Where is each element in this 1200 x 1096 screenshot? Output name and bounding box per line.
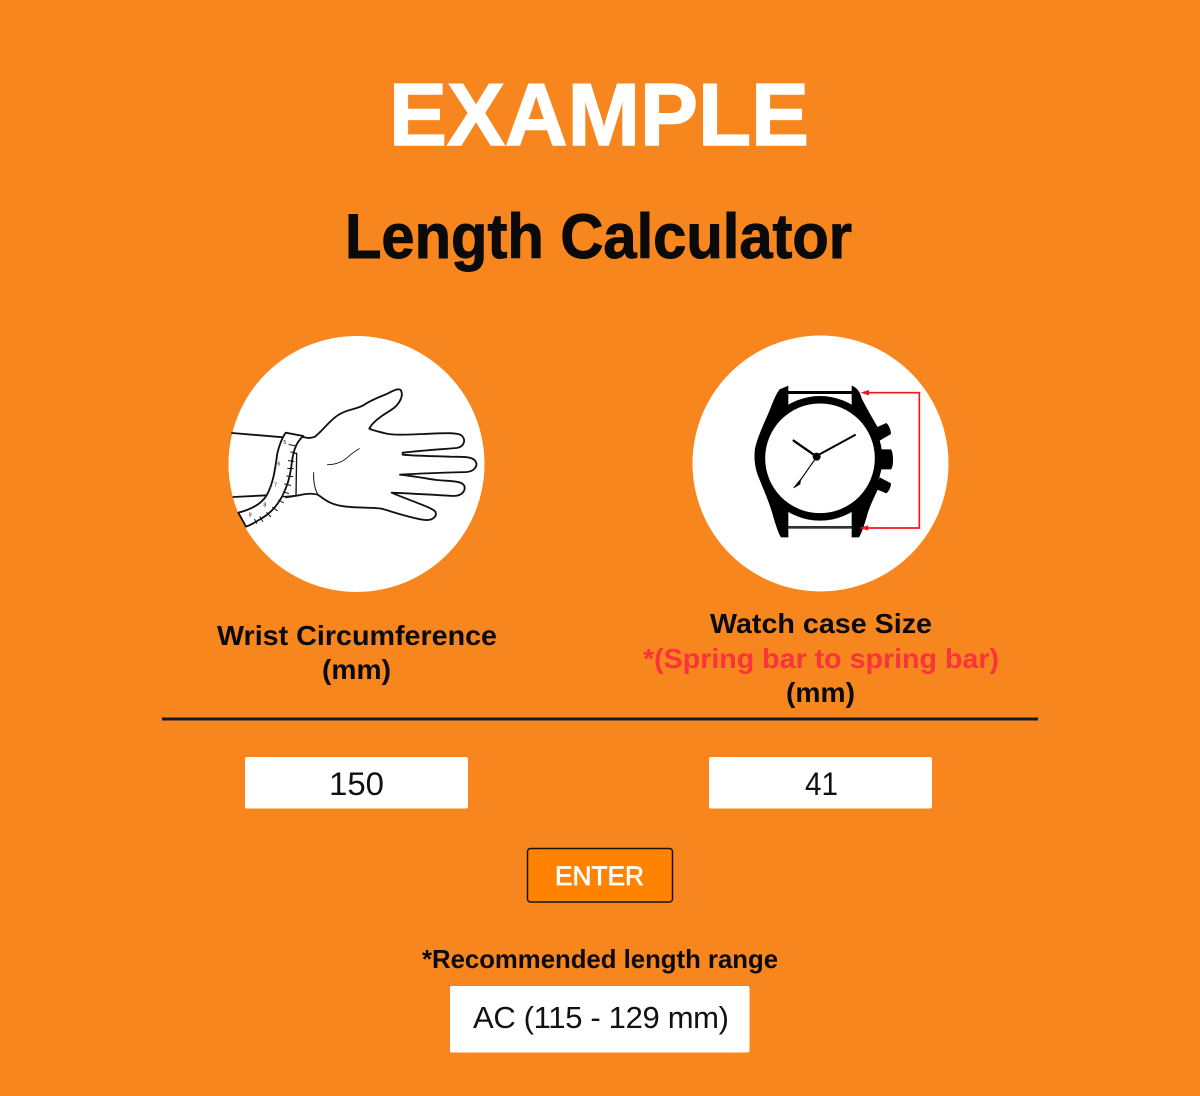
input: wrist value: 150 bbox=[329, 766, 384, 802]
input: watch value: 41 bbox=[805, 766, 838, 802]
label: watch case size: (mm) bbox=[786, 677, 855, 708]
icon: watch with spring bar measurement bbox=[692, 336, 948, 592]
red measurement arrow bbox=[859, 390, 919, 531]
label: wrist circumference: Wrist Circumference bbox=[217, 620, 497, 651]
icon: wrist with measuring tape: 6 bbox=[277, 461, 280, 467]
icon: wrist with measuring tape: 7 bbox=[274, 483, 277, 489]
icon: wrist with measuring tape bbox=[228, 336, 484, 592]
result box bbox=[450, 986, 750, 1052]
icon: wrist with measuring tape: 8 bbox=[263, 503, 266, 509]
title: EXAMPLE bbox=[389, 65, 809, 164]
watch hands bbox=[794, 435, 855, 488]
label: wrist circumference: (mm) bbox=[322, 654, 391, 685]
enter button bbox=[528, 848, 672, 902]
label: watch case size: *(Spring bar to spring bar) bbox=[643, 643, 999, 674]
enter button: ENTER bbox=[555, 861, 644, 891]
icon: wrist with measuring tape: 9 bbox=[249, 513, 252, 519]
label: watch case size: Watch case Size bbox=[710, 608, 932, 639]
input: wrist value bbox=[245, 757, 468, 808]
icon: wrist with measuring tape: 5 bbox=[283, 440, 286, 446]
result box: AC (115 - 129 mm) bbox=[473, 1000, 729, 1035]
watch case bbox=[754, 386, 893, 537]
input: watch value bbox=[709, 757, 932, 808]
subtitle: Length Calculator bbox=[345, 202, 852, 272]
label: wrist circumference bbox=[217, 620, 497, 685]
label: recommended length range: *Recommended length range bbox=[422, 944, 778, 974]
label: watch case size bbox=[643, 608, 999, 708]
